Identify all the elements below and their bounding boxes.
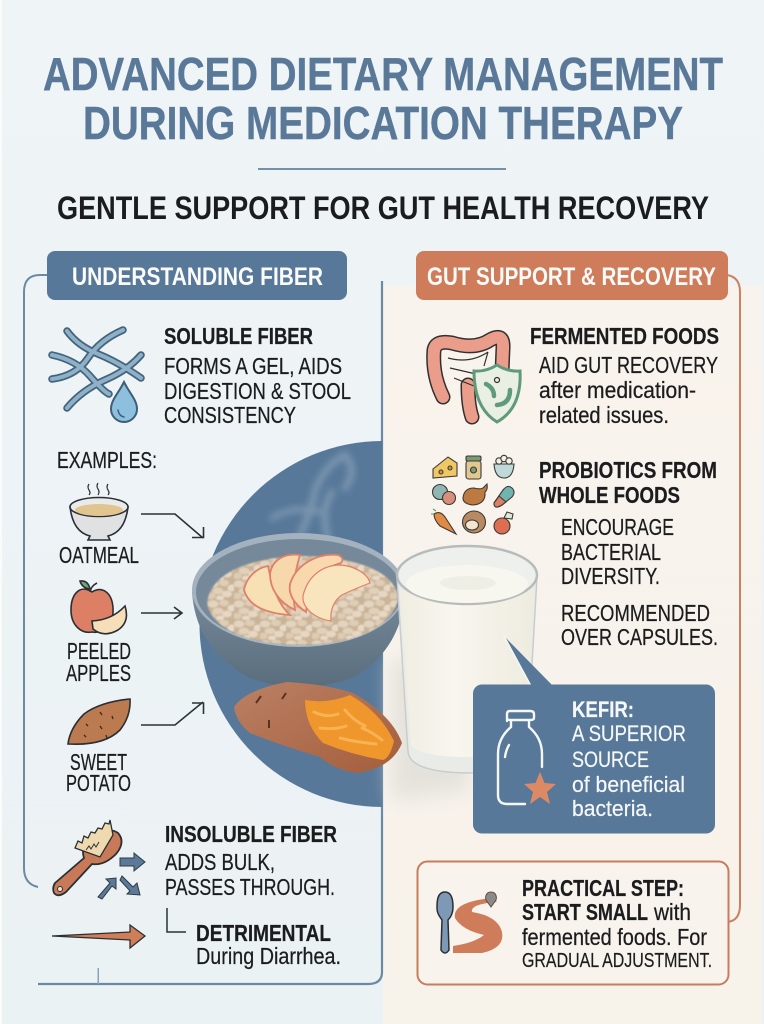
icon: peeled apple (71, 581, 126, 634)
text: probiotics from whole foods: ENCOURAGE (561, 514, 674, 540)
label: peeled apples: APPLES (66, 660, 131, 686)
label: peeled apples: PEELED (67, 638, 131, 664)
panel frame and blue half disc (23, 274, 384, 986)
text: practical step (522, 875, 712, 972)
callout: kefir (473, 636, 715, 834)
text: practical step: with (653, 899, 691, 925)
text: kefir: of beneficial (572, 772, 685, 797)
panel: understanding fiber (23, 251, 384, 986)
glass of kefir (397, 546, 537, 773)
arrow: orange detriment arrow (52, 925, 145, 948)
label: sweet potato: SWEET (70, 749, 127, 775)
text: insoluble fiber: ADDS BULK, (165, 849, 275, 875)
text: detrimental during diarrhea: During Diarrhea. (196, 943, 341, 969)
text: practical step: fermented foods. For (522, 924, 707, 950)
arrow: apple to bowl (141, 607, 182, 619)
text: insoluble fiber (165, 821, 337, 900)
apple slices (244, 555, 370, 621)
text: practical step: START SMALL (522, 899, 648, 925)
heading: gut support and recovery (416, 251, 728, 300)
text: fermented foods: related issues. (539, 402, 669, 428)
connector: insoluble to detrimental (167, 908, 186, 932)
icon grid: whole food probiotics (431, 455, 514, 534)
text: probiotics from whole foods: BACTERIAL (561, 539, 661, 565)
text: soluble fiber: SOLUBLE FIBER (164, 323, 313, 349)
text: insoluble fiber: INSOLUBLE FIBER (165, 821, 337, 847)
text: detrimental during diarrhea (196, 920, 341, 969)
label: sweet potato (66, 749, 131, 796)
icon: spoon and winding road (437, 892, 502, 953)
oatmeal bowl with apple slices (192, 533, 405, 687)
text: probiotics from whole foods: PROBIOTICS FROM (539, 457, 717, 483)
soft shadow (392, 660, 470, 800)
arrow: oatmeal to bowl (141, 514, 204, 538)
icon: kefir bottle with star (498, 711, 556, 804)
text: fermented foods: after medication- (539, 377, 696, 403)
label: examples: EXAMPLES: (57, 447, 157, 473)
baked sweet potato (234, 682, 402, 773)
label: sweet potato: POTATO (66, 770, 131, 796)
text: soluble fiber: CONSISTENCY (164, 402, 296, 428)
text: kefir: A SUPERIOR (572, 721, 686, 746)
text: practical step: PRACTICAL STEP: (522, 875, 684, 901)
heading: understanding fiber (47, 251, 347, 300)
text: probiotics from whole foods: OVER CAPSULES. (561, 624, 718, 650)
illustration: oatmeal, sweet potato and kefir (192, 455, 537, 800)
text: soluble fiber: DIGESTION & STOOL (164, 378, 351, 404)
text: fermented foods: AID GUT RECOVERY (539, 352, 718, 378)
text: probiotics from whole foods: WHOLE FOODS (539, 482, 680, 508)
title (43, 48, 723, 149)
icon: oatmeal bowl (70, 483, 128, 540)
heading: understanding fiber: UNDERSTANDING FIBER (72, 263, 323, 291)
text: practical step: GRADUAL ADJUSTMENT. (522, 950, 712, 972)
panel frame (727, 275, 740, 922)
arrow: sweet potato to bowl (141, 702, 204, 725)
callout box: practical step (418, 862, 728, 984)
text: soluble fiber: FORMS A GEL, AIDS (164, 353, 342, 379)
text: probiotics from whole foods (539, 457, 718, 650)
text: kefir: KEFIR: (572, 697, 634, 722)
text: kefir: bacteria. (572, 796, 653, 821)
text: probiotics from whole foods: RECOMMENDED (561, 600, 710, 626)
steam (272, 455, 352, 538)
panel: gut support background (383, 285, 762, 1024)
text: soluble fiber (164, 323, 351, 428)
icon: sweet potato (68, 699, 130, 744)
label: peeled apples (66, 638, 131, 686)
text: probiotics from whole foods: DIVERSITY. (561, 563, 660, 589)
icon: insoluble fiber brush and arrows (53, 820, 145, 899)
panel: gut support and recovery (416, 251, 740, 984)
icon: soluble fiber strands and droplet (52, 330, 141, 422)
icon: gut with green shield (434, 337, 520, 422)
text: insoluble fiber: PASSES THROUGH. (165, 874, 335, 900)
text: fermented foods (530, 323, 719, 428)
text: fermented foods: FERMENTED FOODS (530, 323, 719, 349)
label: oatmeal: OATMEAL (59, 542, 139, 568)
text: kefir (572, 697, 686, 821)
text: kefir: SOURCE (572, 747, 649, 772)
text: detrimental during diarrhea: DETRIMENTAL (196, 920, 331, 946)
